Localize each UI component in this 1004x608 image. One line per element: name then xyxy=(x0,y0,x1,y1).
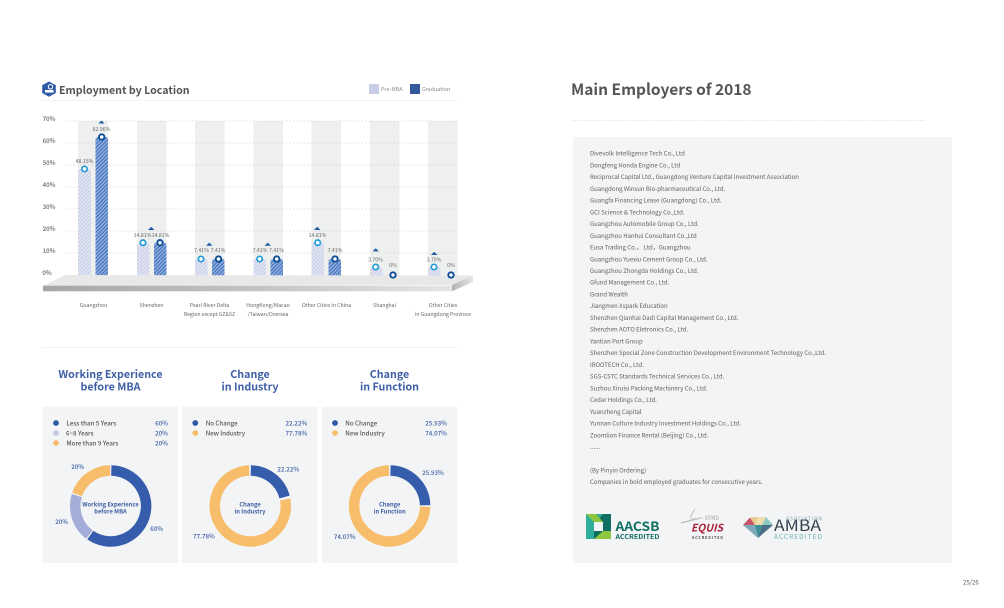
category labels: Other Cities in China xyxy=(302,302,351,309)
heading: Change in Industry: in Industry xyxy=(221,380,279,395)
legend: change in function: 25.93% xyxy=(425,418,447,428)
legend: change in industry: New Industry xyxy=(206,428,246,438)
data labels: 0% xyxy=(389,262,397,269)
text block: company names: Yuanzheng Capital xyxy=(589,407,642,416)
platform xyxy=(43,275,473,291)
text block: company names: Zoomlion Finance Rental (Beijing) Co., Ltd. xyxy=(590,430,709,439)
data labels: 7.41% xyxy=(269,247,284,254)
donut chart: change in function: 25.93% xyxy=(422,468,444,477)
panel: working experience xyxy=(43,407,178,563)
axis labels: 20% xyxy=(43,224,56,233)
category labels: Shanghai xyxy=(373,302,396,309)
text block: ordering note: Companies in bold employed graduates for consecutive years. xyxy=(590,477,763,486)
heading: Employment by Location: Employment by Location xyxy=(59,83,190,98)
logo: EQUIS: EFMD xyxy=(705,513,719,522)
text block: company names: Guangzhou Zhongda Holdings Co., Ltd. xyxy=(590,266,699,275)
legend: working experience: 20% xyxy=(155,428,168,438)
donut chart: working experience: 60% xyxy=(150,524,163,533)
text block: company names: Yunnan Culture Industry Investment Holdings Co., Ltd. xyxy=(589,419,741,428)
legend: change in function xyxy=(332,418,447,438)
heading: Working Experience before MBA: Working Experience xyxy=(58,367,163,382)
data labels xyxy=(76,126,455,269)
heading: Change in Function: in Function xyxy=(360,380,419,395)
category labels: HongKong/Macao xyxy=(246,302,290,309)
text block: company names: Shenzhen Qianhai Dadi Capital Management Co., Ltd. xyxy=(590,313,739,322)
donut chart: change in function: Change xyxy=(379,500,401,508)
text block: company names: GCI Science & Technology Co.,Ltd. xyxy=(590,207,685,216)
legend: location chart xyxy=(369,84,450,94)
legend: location chart: Pre-MBA xyxy=(381,85,403,93)
legend: change in industry: 22.22% xyxy=(286,418,307,428)
data labels: 14.81% xyxy=(309,232,327,239)
legend: change in function: No Change xyxy=(345,418,378,428)
text block: company names: Guangzhou Automobile Group Co., Ltd. xyxy=(590,219,699,228)
text block: company names: Shenzhen Special Zone Construction Development Environment Technology Co.,Ltd. xyxy=(590,348,826,357)
page number: 25/26 xyxy=(963,578,979,586)
text block: company names: Reciprocal Capital Ltd., Guangdong Venture Capital Investment Association xyxy=(590,172,799,181)
donut chart: change in function: 74.07% xyxy=(334,532,356,541)
data labels: 14.81% xyxy=(152,232,170,239)
donut chart: working experience: 20% xyxy=(71,462,84,471)
text block: company names: Dongfeng Honda Engine Co., Ltd xyxy=(590,160,680,169)
text block: company names: Guangfa Financing Lease (Guangdong) Co., Ltd. xyxy=(590,196,722,205)
text block: company names: Shenzhen AOTO Eletronics Co., Ltd. xyxy=(590,325,688,334)
donut chart: change in industry xyxy=(193,464,299,541)
text block: ordering note xyxy=(590,465,763,486)
text block: ordering note: (By Pinyin Ordering) xyxy=(590,465,646,474)
panel: change in function xyxy=(322,407,458,563)
data labels: 3.70% xyxy=(427,256,442,264)
donut chart: change in function xyxy=(334,468,444,541)
logo: EQUIS xyxy=(681,509,724,541)
text block: company names: Cedar Holdings Co., Ltd. xyxy=(590,395,657,404)
legend: working experience: Less than 5 Years xyxy=(66,418,116,428)
legend: working experience: More than 9 Years xyxy=(66,438,118,448)
logo: EQUIS: EQUIS xyxy=(691,520,724,536)
axis labels: 30% xyxy=(43,202,56,211)
icon: employment location badge xyxy=(42,82,56,97)
donut chart: working experience: before MBA xyxy=(94,506,127,516)
data labels: 3.70% xyxy=(368,256,383,264)
donut chart: change in function: in Function xyxy=(374,506,406,516)
data labels: 62.96% xyxy=(93,126,111,133)
column bands xyxy=(78,121,458,277)
logo: AACSB xyxy=(586,514,660,541)
legend: location chart: Graduation xyxy=(422,85,450,93)
data labels: 0% xyxy=(447,262,455,269)
donut chart: change in industry: Change xyxy=(239,500,261,508)
category labels: in Guangdong Province xyxy=(415,311,471,318)
direction triangles xyxy=(98,120,438,255)
legend: change in industry xyxy=(192,418,307,438)
logo: AMBA: SSOCIATION xyxy=(786,516,822,522)
category labels: Guangzhou xyxy=(80,302,107,309)
axis labels: 60% xyxy=(43,136,56,145)
data labels: 14.81% xyxy=(134,232,152,239)
data labels: 7.41% xyxy=(194,247,209,254)
text block: company names: Guangzhou Hanhui Consultant Co.,Ltd xyxy=(590,231,697,240)
text block: company names xyxy=(589,149,826,451)
bar chart: employment by location xyxy=(42,114,473,318)
axis labels: 70% xyxy=(43,114,56,123)
text block: company names: Gfund Management Co., Ltd. xyxy=(590,278,670,287)
donut chart: working experience xyxy=(55,462,163,541)
text block: company names: Yantian Port Group xyxy=(589,336,643,345)
text block: company names: Grand Wealth xyxy=(590,290,628,298)
legend: change in industry: 77.78% xyxy=(286,428,307,438)
donut chart: working experience: Working Experience xyxy=(82,500,139,508)
heading: Main Employers of 2018: Main Employers of 2018 xyxy=(571,78,752,100)
text block: company names: Guangdong Winsun Bio-pharmaceutical Co., Ltd. xyxy=(590,184,726,193)
legend: change in industry: No Change xyxy=(206,418,238,428)
donut chart: change in industry: in Industry xyxy=(235,506,266,516)
logo: EQUIS: ACCREDITED xyxy=(691,536,723,541)
legend: working experience xyxy=(53,418,168,448)
panel: change in industry xyxy=(182,407,318,563)
donut chart: change in industry: 77.78% xyxy=(193,532,215,540)
legend: change in function: 74.07% xyxy=(425,428,447,438)
text block: company names: Guangzhou Yuexiu Cement Group Co., Ltd. xyxy=(590,254,708,263)
text block: company names: Divevolk Intelligence Tech Co., Ltd xyxy=(590,149,685,158)
axis labels: 50% xyxy=(43,158,56,167)
axis labels: 0% xyxy=(42,268,52,277)
logo: AMBA: AMBA xyxy=(774,514,822,536)
legend: working experience: 20% xyxy=(155,438,168,448)
category labels: Shenzhen xyxy=(140,302,163,309)
legend: working experience: 6~8 Years xyxy=(66,428,94,438)
heading: Working Experience before MBA: before MBA xyxy=(80,380,141,395)
donut chart: working experience: 20% xyxy=(55,517,68,526)
heading: Change in Industry: Change xyxy=(230,367,270,382)
axis labels xyxy=(42,114,56,277)
category labels xyxy=(80,302,471,318)
donut chart: change in industry: 22.22% xyxy=(277,464,299,474)
category labels: Pearl River Delta xyxy=(190,302,229,309)
bars xyxy=(78,137,440,279)
axis labels: 40% xyxy=(43,180,56,189)
logo: AACSB: ACCREDITED xyxy=(614,531,660,541)
logo: AMBA: ACCREDITED xyxy=(774,531,822,541)
legend: working experience: 60% xyxy=(155,418,168,428)
text block: company names: Jiangmen Xspark Education xyxy=(590,301,668,310)
text block: company names: SGS-CSTC Standards Technical Services Co., Ltd. xyxy=(590,372,725,381)
legend: change in function: New Industry xyxy=(345,428,385,438)
text block: company names: Eusa Trading Co.， Ltd，Guangzhou xyxy=(590,242,691,252)
category labels: Other Cities xyxy=(429,302,458,309)
data labels: 7.41% xyxy=(253,247,268,254)
text block: company names: ...... xyxy=(590,442,600,451)
data labels: 7.41% xyxy=(328,247,343,254)
category labels: Region except GZ&SZ xyxy=(184,311,235,318)
text block: company names: IROOTECH Co., Ltd. xyxy=(590,360,644,369)
data labels: 48.15% xyxy=(76,158,94,165)
logo: AMBA xyxy=(743,514,822,541)
data labels: 7.41% xyxy=(211,247,226,254)
markers xyxy=(82,134,454,278)
logo: AACSB: AACSB xyxy=(614,516,660,535)
category labels: /Taiwan/Oversea xyxy=(248,311,288,318)
panel: employers list xyxy=(573,137,952,563)
axis labels: 10% xyxy=(43,246,56,255)
text block: company names: Suzhou Xiruisi Packing Machinery Co., Ltd. xyxy=(590,383,708,392)
heading: Change in Function: Change xyxy=(370,367,409,382)
